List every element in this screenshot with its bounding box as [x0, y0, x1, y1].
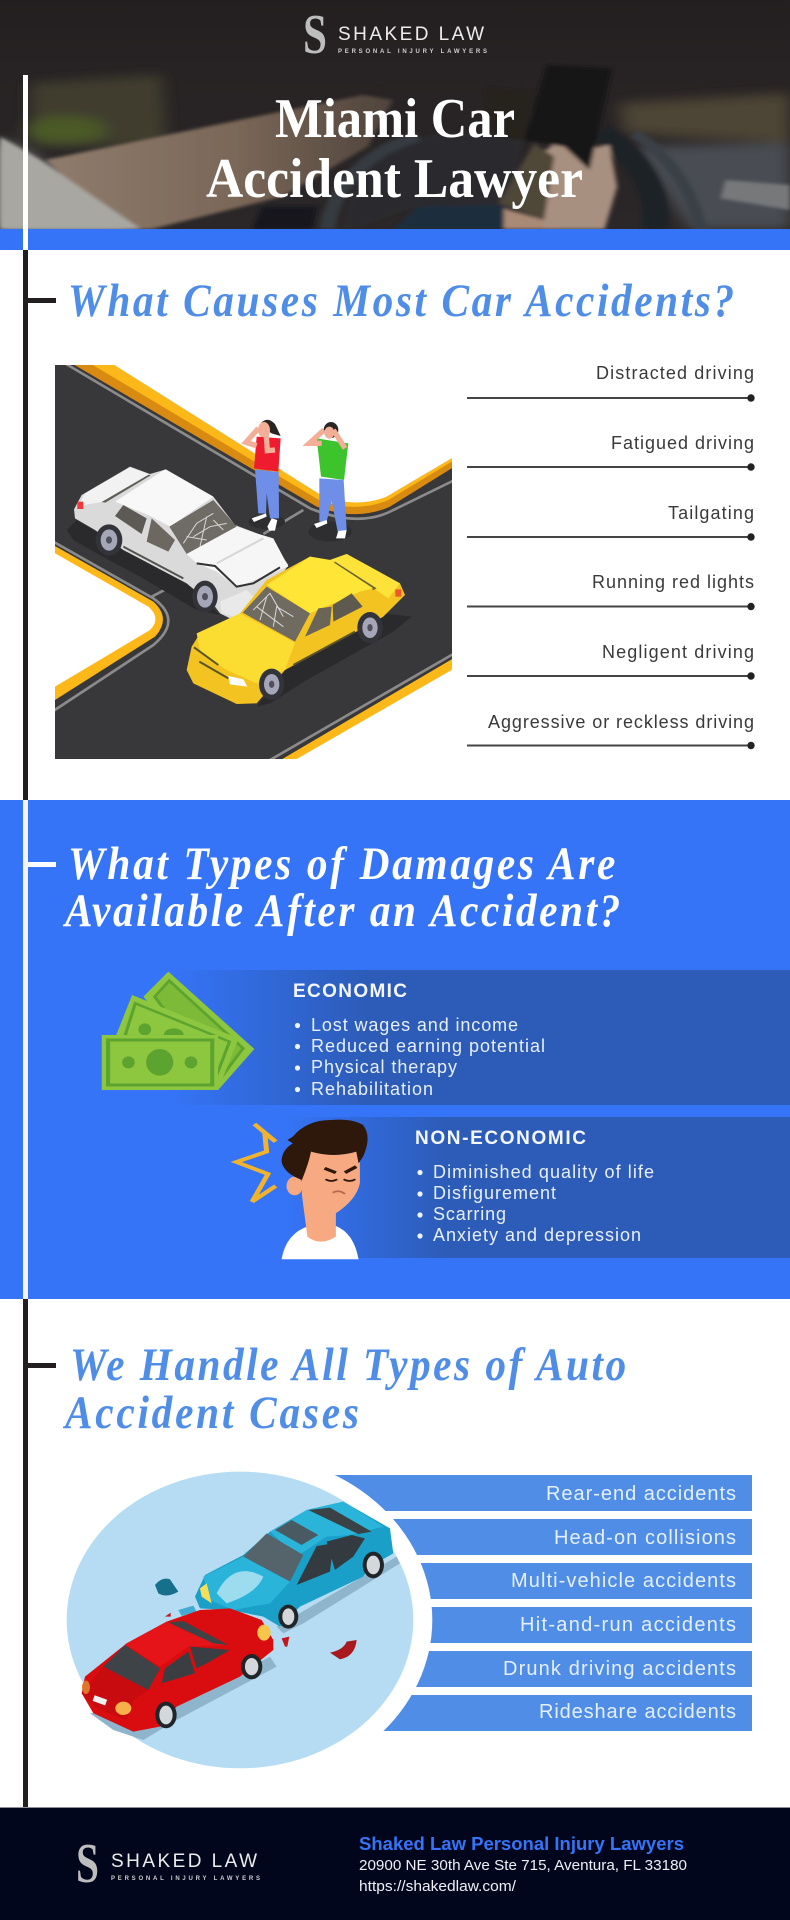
lane markings [53, 363, 453, 760]
title: Accident Lawyer [206, 148, 583, 210]
panel: non-economic: NON-ECONOMIC [415, 1128, 586, 1149]
bar 1 [310, 1475, 752, 1511]
bar 2: Head-on collisions [554, 1527, 736, 1549]
cause 1 [467, 363, 755, 402]
panel: footer [0, 1807, 790, 1920]
bar 3 [310, 1563, 752, 1599]
header logo [303, 4, 487, 66]
footer logo: S [76, 1833, 99, 1895]
icon: person with headache [236, 1120, 368, 1259]
timeline line [23, 75, 56, 1809]
panel: damages background [0, 800, 790, 1299]
bar 2 [310, 1519, 752, 1555]
cause 6 [467, 712, 755, 749]
economic list: Rehabilitation [311, 1079, 433, 1099]
economic list: Reduced earning potential [311, 1036, 545, 1056]
footer contact text: 20900 NE 30th Ave Ste 715, Aventura, FL 33180 [359, 1858, 687, 1874]
footer logo: SHAKED LAW [111, 1851, 257, 1872]
panel: economic [170, 970, 790, 1105]
cause 2: Fatigued driving [611, 433, 754, 453]
title: Miami Car [275, 88, 515, 150]
cause 3 [467, 503, 755, 541]
heading: handle all types [62, 1339, 626, 1439]
person: woman in red [246, 420, 285, 531]
illustration: car crash at intersection [53, 363, 453, 760]
cause 1: Distracted driving [596, 363, 754, 383]
icon: money [102, 972, 254, 1090]
heading: what causes: What Causes Most Car Accidents? [68, 275, 734, 327]
footer contact text: https://shakedlaw.com/ [359, 1879, 517, 1895]
header logo: SHAKED LAW [338, 24, 484, 45]
bar 3: Multi-vehicle accidents [511, 1570, 736, 1592]
bar 6: Rideshare accidents [539, 1701, 736, 1723]
bar 6 [310, 1695, 752, 1731]
panel: non-economic [285, 1117, 790, 1258]
bar 1: Rear-end accidents [546, 1483, 736, 1505]
list: causes of accidents [467, 363, 755, 749]
heading: types of damages: What Types of Damages Are [68, 838, 615, 890]
cause 5: Negligent driving [602, 642, 754, 662]
header blue band [0, 229, 790, 250]
bar 4: Hit-and-run accidents [520, 1614, 736, 1636]
list: accident type bars [310, 1475, 752, 1731]
non-economic list: Anxiety and depression [433, 1225, 641, 1245]
curb bottom right [281, 658, 453, 760]
economic list: Lost wages and income [311, 1015, 518, 1035]
heading: handle all types: We Handle All Types of Auto [70, 1339, 626, 1391]
illustration: rear-end collision [48, 1453, 432, 1787]
footer contact text [359, 1834, 687, 1895]
bar 5 [310, 1651, 752, 1687]
economic list [295, 1015, 545, 1099]
red car [82, 1608, 277, 1740]
cause 4 [467, 572, 755, 610]
bar 4 [310, 1607, 752, 1643]
cause 2 [467, 433, 755, 471]
cause 5 [467, 642, 755, 680]
non-economic list: Diminished quality of life [433, 1162, 654, 1182]
yellow car [187, 554, 412, 707]
footer logo: PERSONAL INJURY LAWYERS [111, 1876, 260, 1882]
cause 6: Aggressive or reckless driving [488, 712, 754, 732]
header logo: PERSONAL INJURY LAWYERS [338, 49, 487, 55]
cause 3: Tailgating [668, 503, 754, 523]
title [206, 88, 583, 210]
curb top [72, 363, 453, 514]
white car [67, 467, 288, 618]
footer logo [76, 1833, 260, 1895]
non-economic list: Scarring [433, 1204, 506, 1224]
non-economic list [417, 1162, 654, 1245]
header logo: S [303, 4, 327, 66]
person: man in green [308, 422, 352, 542]
debris [155, 1579, 357, 1659]
bar 5: Drunk driving accidents [503, 1658, 736, 1680]
blue car [195, 1502, 400, 1633]
curb left [53, 545, 163, 701]
heading: types of damages [62, 838, 620, 937]
footer contact text: Shaked Law Personal Injury Lawyers [359, 1834, 684, 1854]
heading: types of damages: Available After an Accident? [62, 885, 620, 937]
cause 4: Running red lights [592, 572, 754, 592]
panel: economic: ECONOMIC [293, 981, 407, 1002]
non-economic list: Disfigurement [433, 1183, 556, 1203]
economic list: Physical therapy [311, 1057, 457, 1077]
heading: handle all types: Accident Cases [62, 1387, 359, 1439]
panel: header photo [0, 0, 790, 230]
